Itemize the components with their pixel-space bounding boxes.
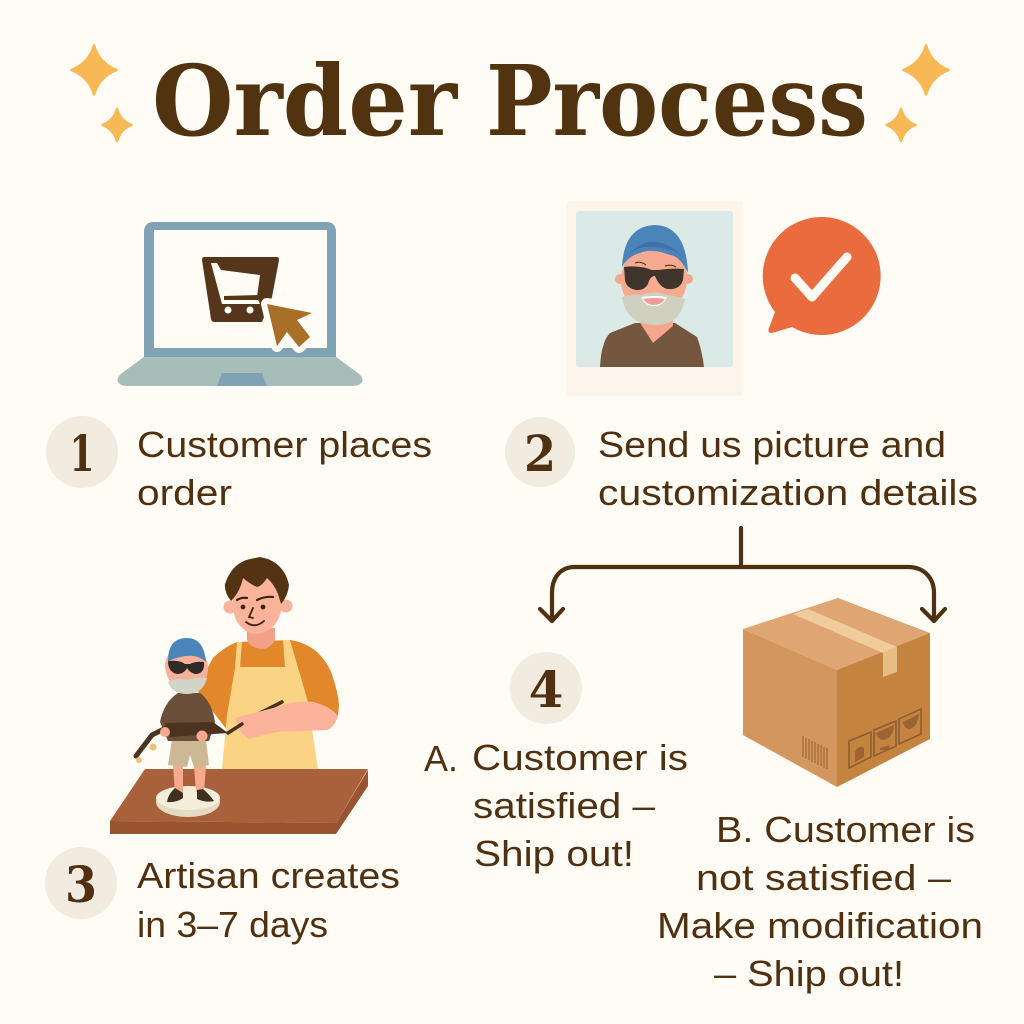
branching arrow — [540, 528, 945, 621]
table front — [110, 821, 336, 834]
artisan face features — [237, 597, 273, 625]
table — [110, 769, 368, 823]
figurine shorts — [168, 740, 209, 767]
step 3 text: Artisan creates — [137, 855, 400, 896]
icon: sparkles left — [72, 46, 132, 141]
figurine shirt — [160, 693, 215, 741]
apron — [222, 640, 318, 769]
step 2 text — [598, 424, 978, 513]
figurine cap — [168, 638, 206, 662]
step 1 text: Customer places — [137, 424, 432, 465]
figurine beard — [168, 678, 207, 694]
title — [152, 44, 868, 158]
step 3 text: in 3–7 days — [137, 904, 328, 945]
option A text: A. — [424, 738, 458, 779]
figurine branch — [136, 722, 242, 763]
title: Process — [486, 44, 868, 158]
option B text: B. Customer is — [716, 809, 975, 850]
option B text: Make modification — [657, 905, 983, 946]
step 3 badge — [45, 847, 117, 919]
figurine hands — [160, 727, 208, 742]
carving stick — [242, 702, 282, 722]
icon: sparkles right — [886, 46, 948, 141]
option B text — [657, 809, 983, 994]
option A text — [424, 737, 688, 874]
option A text: satisfied – — [473, 785, 655, 826]
step 2 badge: 2 — [524, 424, 556, 483]
option A text: Ship out! — [474, 833, 634, 874]
artisan shirt — [198, 640, 339, 730]
icon: photo of customer — [566, 201, 743, 396]
title: Order — [152, 44, 459, 158]
figurine base — [156, 786, 220, 817]
table side — [336, 770, 368, 834]
step 3 badge: 3 — [65, 855, 97, 914]
artisan neck — [247, 628, 275, 649]
option B text: not satisfied – — [696, 857, 951, 898]
step 2 badge — [505, 417, 575, 487]
icon: speech bubble with check mark — [763, 217, 881, 335]
figurine head — [165, 648, 208, 692]
illustration: artisan with figurine — [110, 557, 368, 834]
icon: laptop with shopping cart — [117, 222, 363, 386]
step 1 text: order — [137, 472, 232, 513]
step 1 badge — [46, 416, 118, 488]
step 2 text: Send us picture and — [598, 424, 946, 465]
artisan face — [232, 571, 282, 634]
option A text: Customer is — [472, 737, 688, 778]
figurine shoes — [167, 788, 214, 802]
figurine sunglasses — [168, 661, 204, 674]
step 1 badge: 1 — [70, 424, 94, 483]
step 3 text — [137, 855, 400, 945]
artisan ears — [224, 600, 292, 614]
step 4 badge — [510, 652, 582, 724]
artisan arm and hand — [235, 702, 338, 739]
artisan hair — [225, 557, 289, 604]
option B text: – Ship out! — [714, 953, 904, 994]
icon: cardboard box — [743, 598, 930, 787]
step 1 text — [137, 424, 432, 513]
step 4 badge: 4 — [529, 660, 563, 719]
figurine legs — [173, 765, 206, 793]
step 2 text: customization details — [598, 472, 978, 513]
